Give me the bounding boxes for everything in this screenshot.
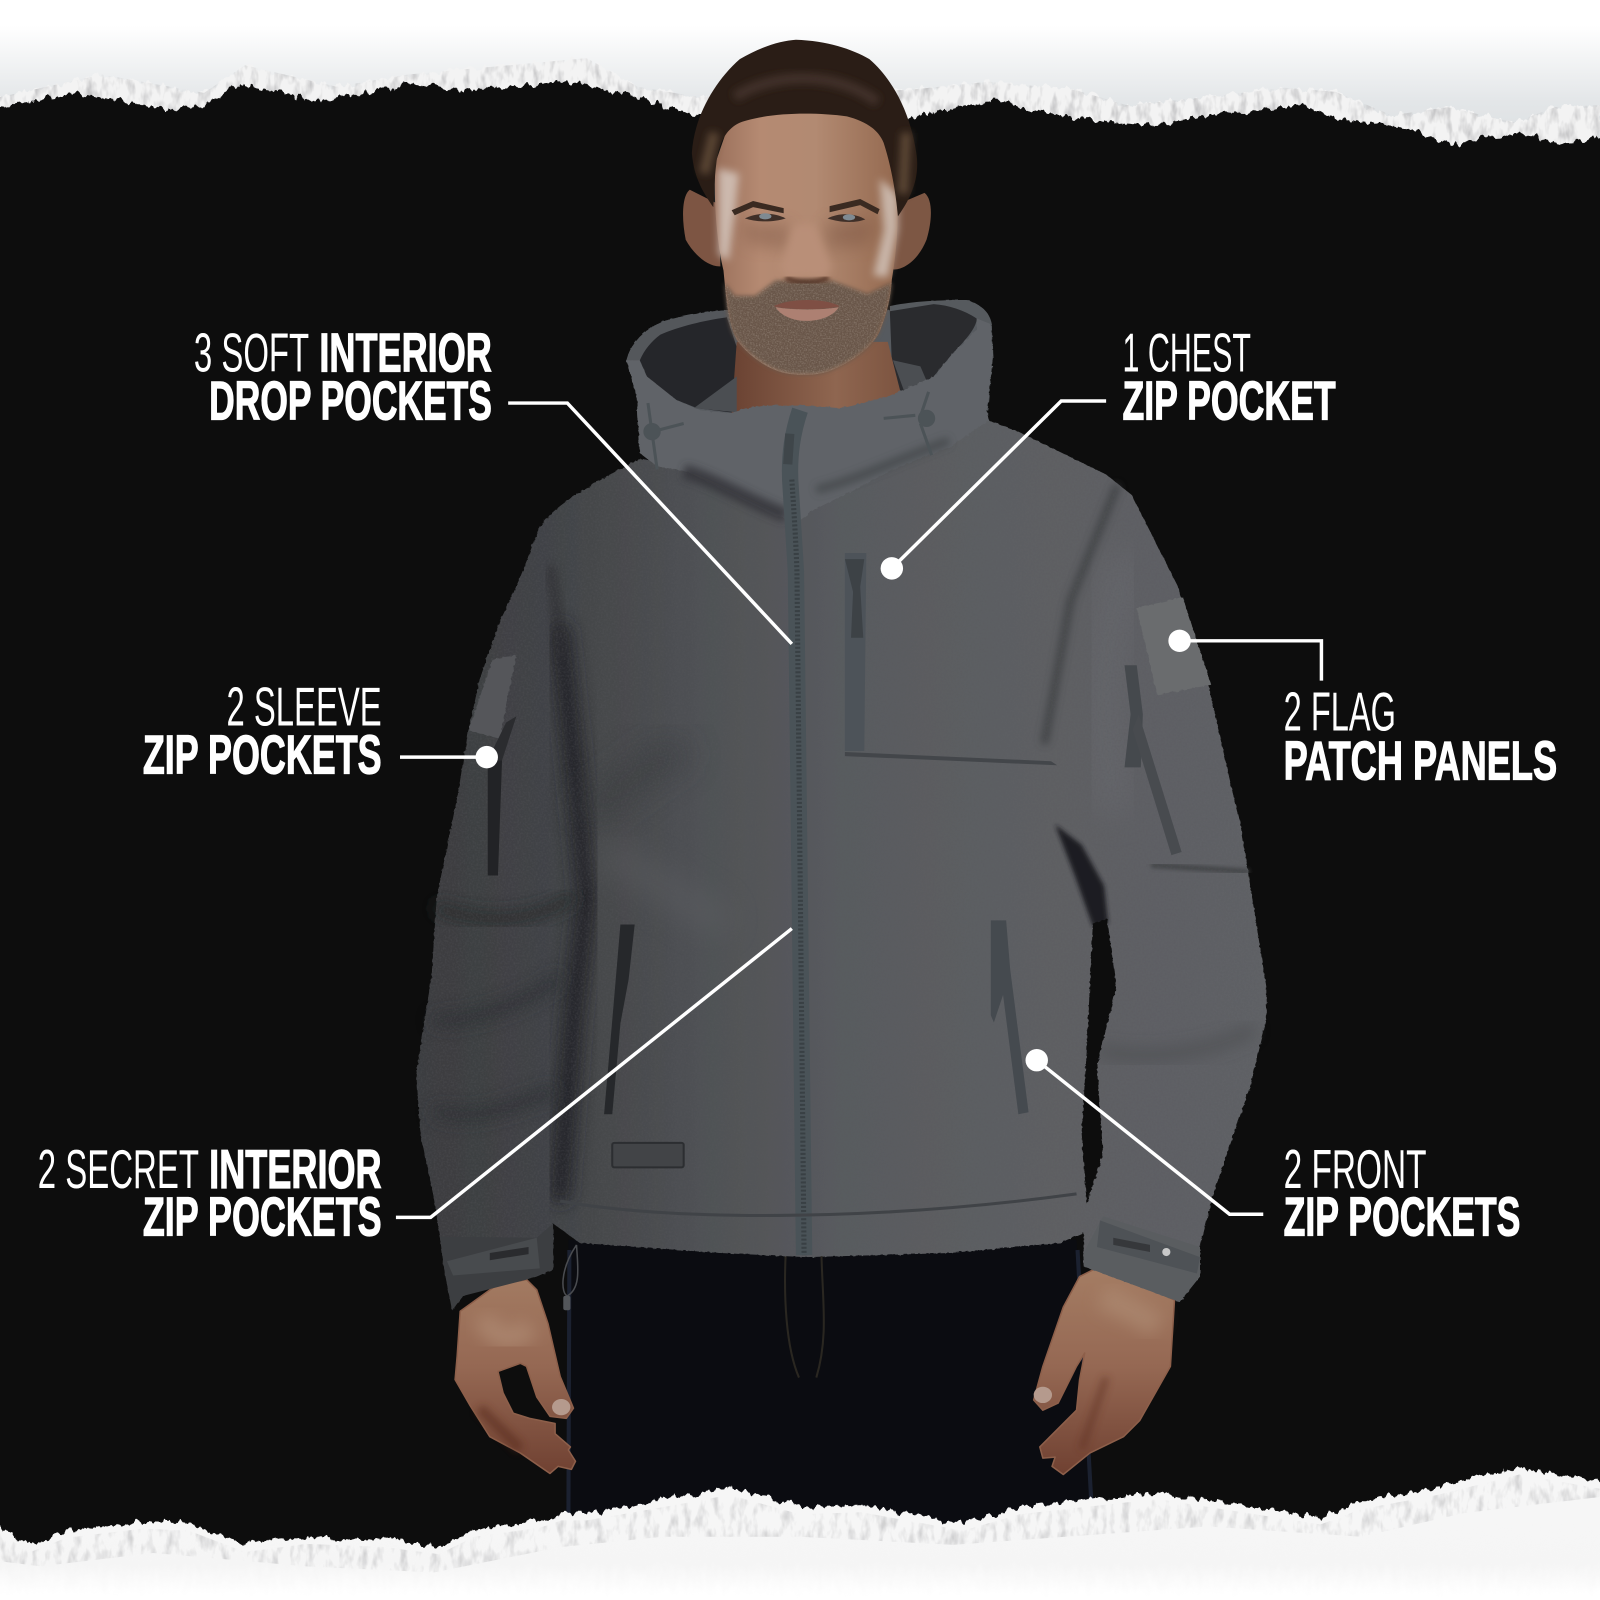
hood back outer [627,300,993,480]
left ear [683,190,720,266]
callout: 3 soft interior drop pockets: DROP POCKETS [209,370,492,431]
jacket body [416,420,1266,1310]
eyebrows [732,199,880,215]
beard [724,280,892,375]
sleeve cuff and strap left [440,1223,553,1310]
callout: 2 secret interior zip pockets [38,929,792,1248]
neck [732,342,905,416]
callout: 2 secret interior zip pockets: INTERIOR [209,1139,382,1200]
callout: 2 flag patch panels: 2 FLAG [1284,682,1396,743]
face shadows [740,219,876,250]
icon: right hand [1034,1266,1174,1474]
callout: 2 sleeve zip pockets: ZIP POCKETS [143,724,382,785]
hood lining left [640,316,737,413]
callout: 1 chest zip pocket: 1 CHEST [1122,322,1251,383]
hem band [560,1194,1077,1215]
icon: drawcord loop at hem [563,1245,578,1310]
flag patch right sleeve [1137,597,1211,695]
temple highlights [718,168,898,278]
jacket folds and shading [439,488,1250,1193]
callout: 2 secret interior zip pockets: ZIP POCKETS [143,1187,382,1248]
callout: 3 soft interior drop pockets: INTERIOR [319,322,492,383]
hair [692,40,917,216]
eyes [745,213,865,222]
hood lining right [890,303,977,396]
dark underarm crease [1055,824,1108,927]
neck band inner hood [694,360,927,412]
person: model wearing the grey fleece jacket [416,40,1266,1531]
callout: 3 soft interior drop pockets: 3 SOFT [194,322,309,383]
fleece texture [416,420,1266,1310]
flag patch left sleeve [468,655,516,739]
trousers [568,1240,1093,1531]
callout: 2 flag patch panels [1168,630,1557,792]
callout: 1 chest zip pocket [881,322,1336,580]
sleeve cuff and strap right [1084,1216,1200,1302]
mouth [773,300,840,321]
logo badge [612,1143,684,1167]
callout: 3 soft interior drop pockets [194,322,792,644]
callout: 2 sleeve zip pockets [143,677,498,785]
main front zip [788,410,804,1255]
hood front and collar [627,300,993,520]
icon: left hand [455,1280,576,1473]
nose [781,222,832,282]
hood drawcords [644,392,935,469]
right ear [893,193,931,269]
callout: 1 chest zip pocket: ZIP POCKET [1122,370,1336,431]
chest zip pocket [845,553,1057,765]
front lower pockets [604,920,1029,1114]
callout: 2 front zip pockets [1026,1049,1520,1248]
torn paper: bottom [0,1459,1600,1600]
torn paper: top [0,48,1600,148]
callout: 2 secret interior zip pockets: 2 SECRET [38,1139,199,1200]
gap between right torso and sleeve [1082,918,1116,1204]
callout: 2 front zip pockets: 2 FRONT [1284,1139,1427,1200]
face [715,100,898,375]
callout: 2 sleeve zip pockets: 2 SLEEVE [227,677,382,738]
sleeve zips [488,665,1182,876]
